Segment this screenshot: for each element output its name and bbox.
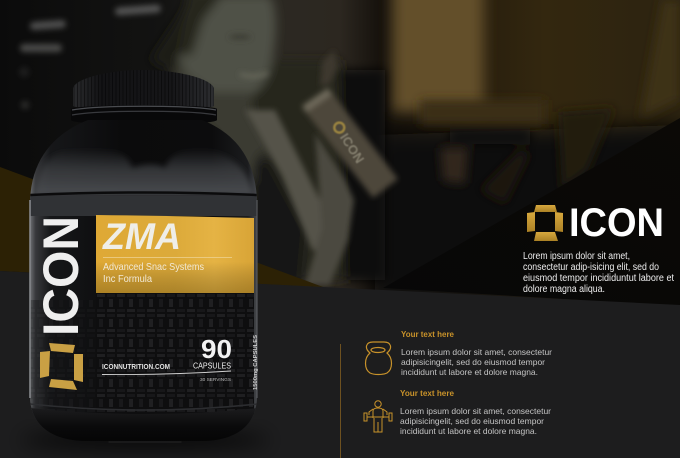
divider line (340, 344, 342, 458)
feature 2 text: adipisicingelit, sed do eiusmod tempor (400, 416, 544, 426)
capsule count: CAPSULES (193, 360, 231, 370)
icon: kettlebell (366, 342, 392, 374)
brand description (523, 251, 674, 295)
dark lower panel (0, 271, 680, 458)
ZMA title: ZMA (102, 216, 181, 257)
feature 1 heading: Your text here (401, 329, 454, 339)
feature 2 (364, 388, 551, 436)
feature 1 text: Lorem ipsum dolor sit amet, consectetur (401, 347, 552, 357)
shadow under tub (20, 433, 270, 447)
gym machines (375, 100, 680, 300)
feature 1 text: adipisicingelit, sed do eiusmod tempor (401, 357, 545, 367)
tub logo mark (40, 343, 83, 390)
woman: hair, face, towel, top (150, 0, 385, 285)
product subtitle: Advanced Snac Systems (103, 261, 204, 273)
brand wordmark: ICON (569, 201, 664, 245)
gold product label (96, 215, 254, 293)
brand logo mark (527, 205, 563, 241)
feature 2 text (400, 406, 551, 436)
feature 2 text: Lorem ipsum dolor sit amet, consectetur (400, 406, 551, 416)
brand description: dolore magna aliqua. (523, 284, 605, 295)
capsule count: 90 (201, 334, 232, 364)
capsule count: 30 SERVINGS (200, 377, 231, 382)
shoulder highlights (36, 152, 254, 196)
product subtitle (103, 261, 204, 285)
feature 1 (366, 329, 552, 377)
background photo: woman in gym (0, 0, 680, 300)
olive accent wedge (0, 167, 323, 287)
website: ICONNUTRITION.COM (102, 362, 170, 371)
tub body (30, 120, 257, 441)
brand block (523, 201, 674, 295)
product tub (20, 70, 270, 447)
sepia gym wall (392, 0, 680, 120)
capsule count (193, 334, 232, 382)
bottle logo text (330, 120, 367, 166)
water bottle with logo (302, 50, 398, 198)
brand description: Lorem ipsum dolor sit amet, (523, 251, 630, 262)
brand description: consectetur adip-isicing elit, sed do (523, 262, 659, 273)
feature 1 text: incididunt ut labore et dolore magna. (401, 367, 538, 377)
tub base (32, 408, 256, 441)
feature 1 text (401, 347, 552, 377)
feature 2 text: incididunt ut labore et dolore magna. (400, 426, 537, 436)
vertical ICON wordmark: ICON (33, 216, 89, 336)
rim highlights (29, 200, 31, 398)
black wedge behind logo (383, 118, 680, 306)
feature 2 heading: Your text here (400, 388, 454, 398)
capsule pattern panel (96, 293, 254, 415)
product subtitle: Inc Formula (103, 273, 152, 285)
bottle logo text: ICON (337, 131, 367, 166)
gym ceiling lights (19, 4, 161, 109)
icon: weightlifter (364, 401, 392, 432)
tub cap (71, 70, 217, 124)
side capsule note: 1500mg CAPSULES (253, 334, 259, 390)
